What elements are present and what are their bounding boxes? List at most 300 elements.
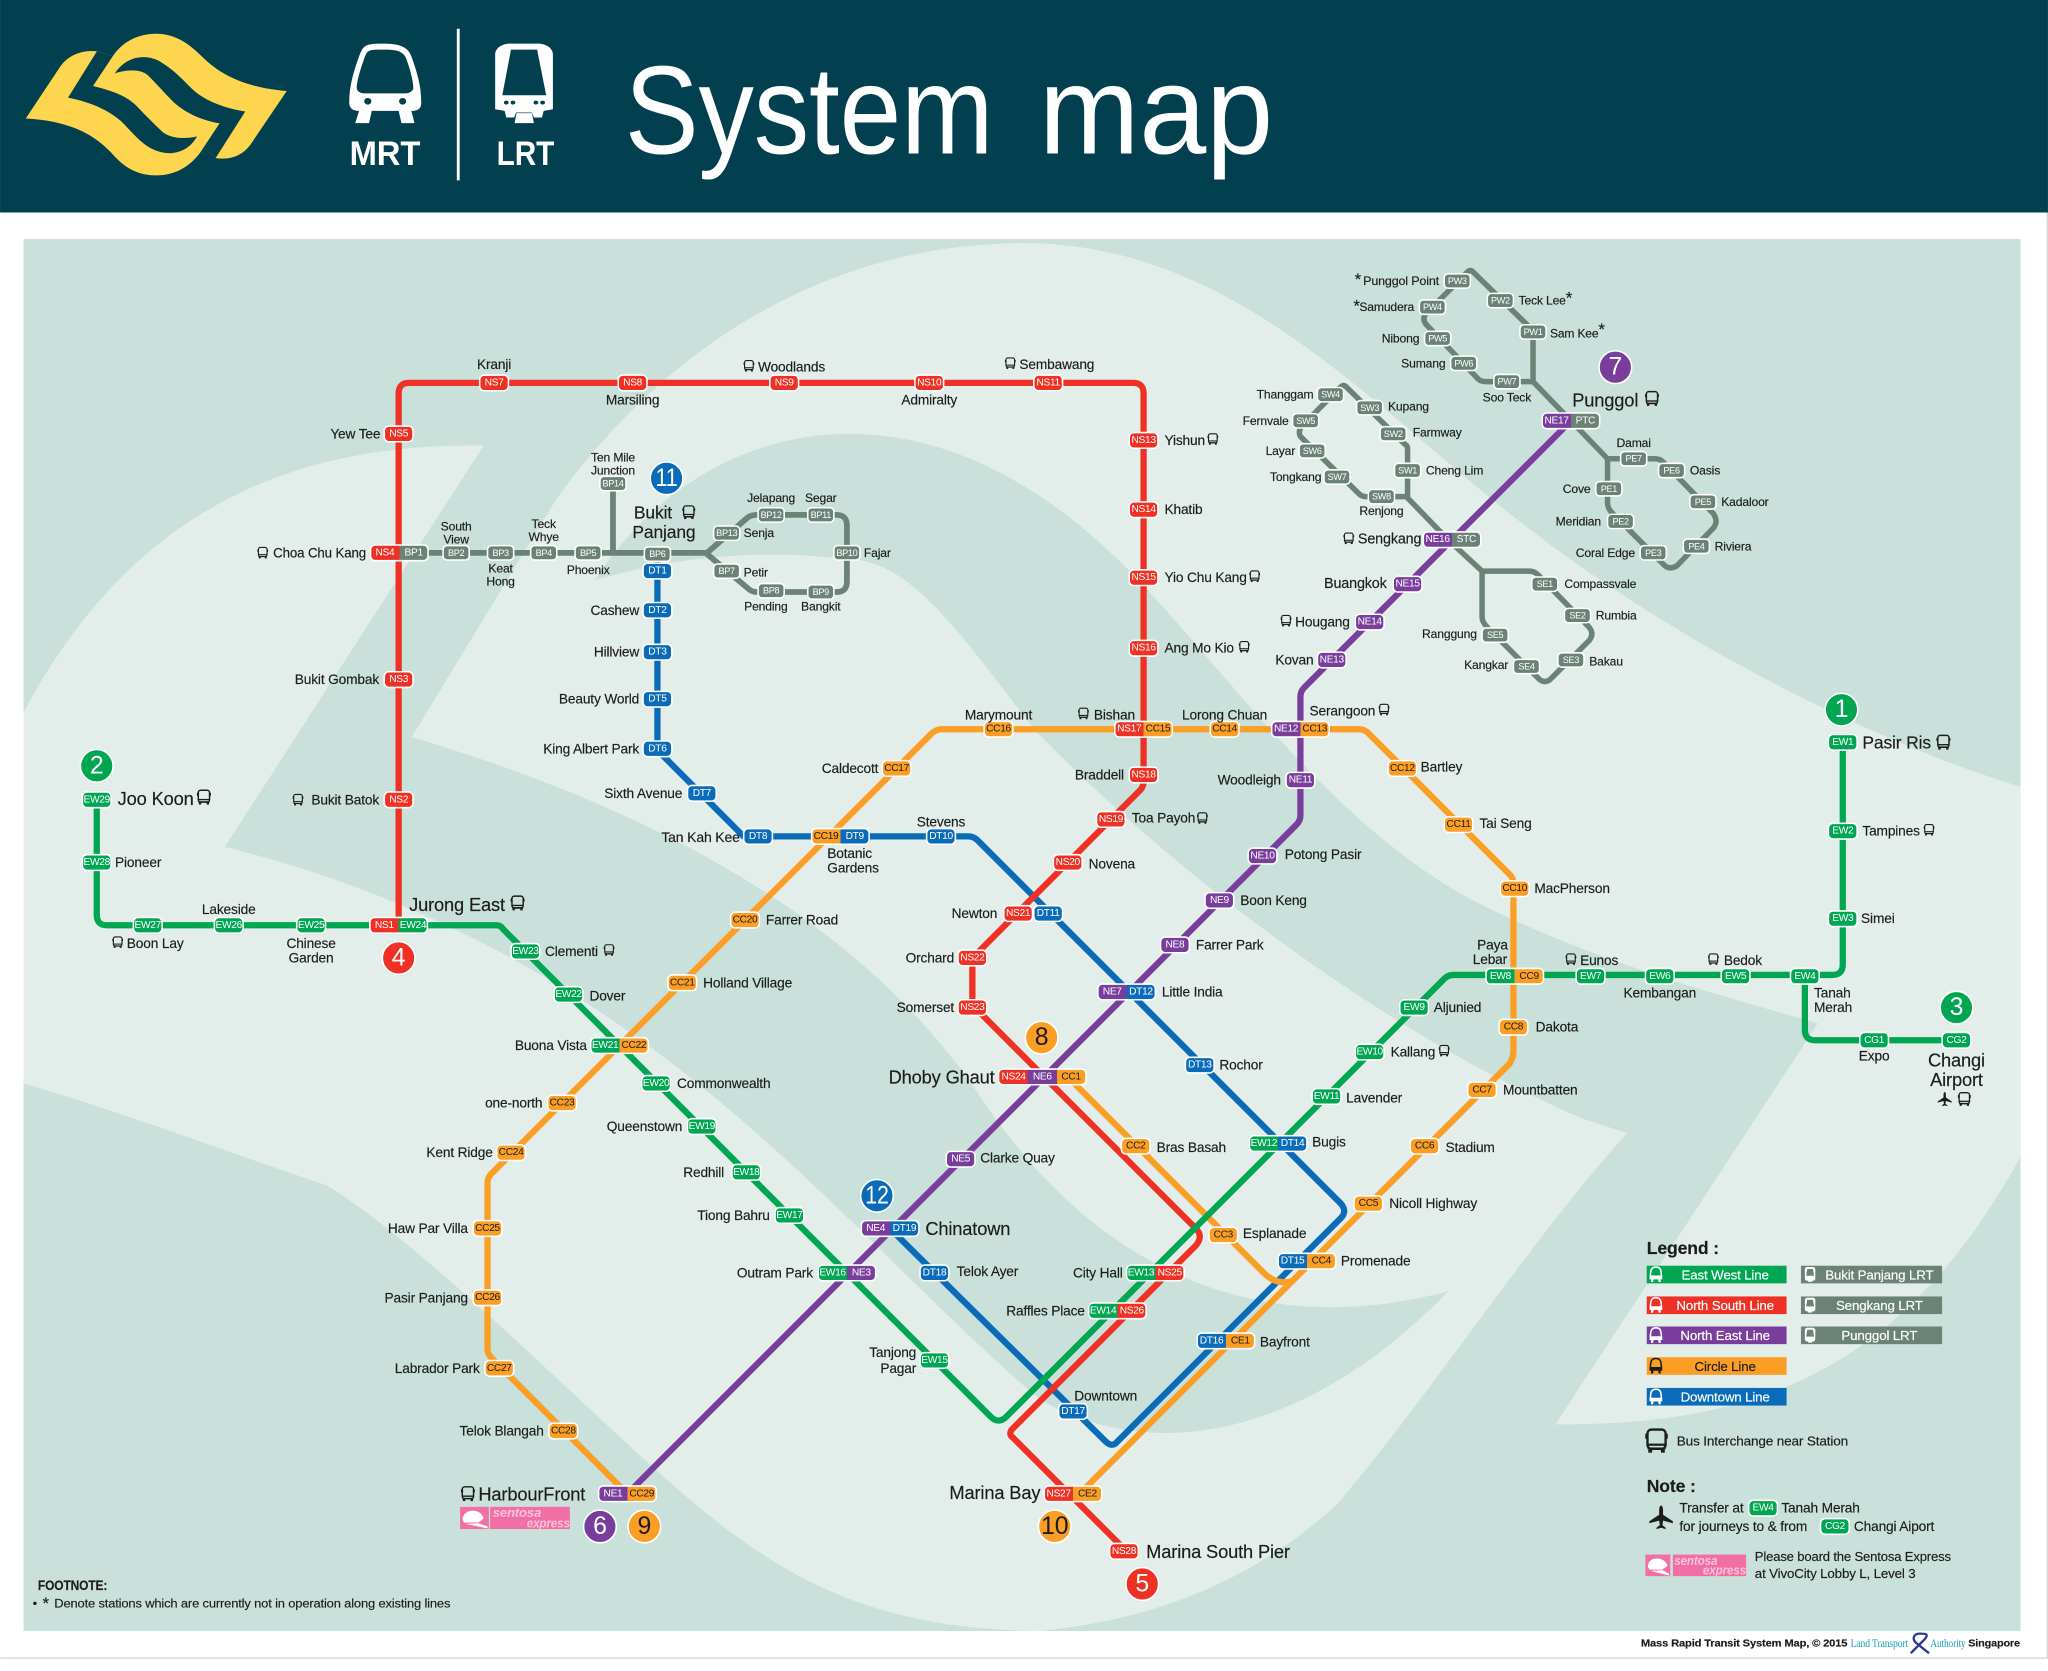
footer credit: Mass Rapid Transit System Map, © 2015	[1641, 1639, 1848, 1650]
North East Line stations: Hougang	[1295, 615, 1350, 630]
numbered terminus markers: 12	[865, 1182, 889, 1209]
icon: airport plane and bus	[1938, 1092, 1971, 1106]
interchange stations: Little India	[1162, 984, 1223, 999]
interchange stations: Sengkang	[1358, 532, 1422, 548]
interchange stations: Raffles Place	[1006, 1303, 1085, 1318]
Punggol LRT stations: PW3	[1448, 276, 1467, 286]
Punggol LRT stations: PE2	[1612, 516, 1629, 526]
interchange stations: DT15	[1281, 1256, 1305, 1267]
interchange stations: EW12	[1251, 1138, 1278, 1149]
Downtown Line stations: Rochor	[1219, 1058, 1263, 1073]
interchange stations: EW14	[1090, 1305, 1117, 1316]
header banner	[0, 0, 2048, 213]
Punggol LRT stations: *	[1598, 320, 1605, 339]
North South Line stations: NS28	[1112, 1546, 1137, 1557]
North South Line stations: NS7	[485, 377, 504, 388]
East West Line stations: Commonwealth	[677, 1076, 770, 1091]
Bukit Panjang LRT stations: BP6	[649, 549, 666, 559]
North South Line stations: Bukit Batok	[311, 792, 379, 807]
Downtown Line stations: Beauty World	[559, 692, 639, 707]
North South Line stations: Woodlands	[758, 360, 825, 375]
footnote: Denote stations which are currently not in operation along existing lines	[54, 1597, 450, 1611]
note text: Sentosa Express: at VivoCity Lobby L, Level 3	[1755, 1566, 1916, 1581]
Punggol LRT stations: PW7	[1498, 377, 1517, 387]
Downtown Line stations: DT10	[929, 831, 953, 842]
East West Line stations: EW25	[298, 920, 325, 931]
East West Line stations: Expo	[1859, 1048, 1890, 1063]
Circle Line stations: CC23	[550, 1098, 575, 1109]
North East Line stations: Woodleigh	[1218, 773, 1281, 788]
Punggol LRT stations: PW1	[1524, 327, 1543, 337]
interchange stations: Lebar	[1473, 952, 1508, 967]
Sengkang LRT stations: Compassvale	[1564, 577, 1637, 591]
numbered terminus markers: 10	[1041, 1513, 1068, 1540]
interchange stations: EW8	[1490, 971, 1512, 982]
Circle Line stations: CC8	[1504, 1022, 1524, 1033]
numbered terminus markers: 11	[655, 465, 678, 492]
Bukit Panjang LRT stations: BP2	[448, 548, 465, 558]
Downtown Line stations	[543, 563, 1263, 1419]
Sengkang LRT stations: SE1	[1537, 579, 1553, 589]
East West Line stations: Garden	[289, 950, 334, 965]
Bukit Panjang LRT stations: Phoenix	[567, 563, 610, 577]
Circle Line stations: Holland Village	[703, 975, 793, 990]
footer credit: Land Transport	[1851, 1638, 1909, 1650]
Bukit Panjang LRT stations: Hong	[486, 575, 515, 589]
Circle Line stations: CC25	[475, 1223, 501, 1234]
numbered terminus markers: 4	[392, 944, 406, 971]
note text: airport transfer: CG2	[1825, 1521, 1846, 1532]
Downtown Line stations: Tan Kah Kee	[661, 830, 740, 845]
Punggol LRT stations: Sumang	[1401, 356, 1445, 370]
East West Line stations: EW3	[1832, 913, 1854, 924]
North South Line stations: NS20	[1056, 857, 1081, 868]
Circle Line stations: Haw Par Villa	[388, 1221, 468, 1236]
East West Line stations: Bedok	[1724, 953, 1762, 968]
East West Line stations: EW28	[84, 857, 111, 868]
East West Line stations: EW20	[643, 1078, 670, 1089]
icon: plane	[1649, 1506, 1673, 1529]
interchange stations: DT19	[893, 1223, 917, 1234]
Circle Line stations: Kent Ridge	[426, 1145, 493, 1160]
East West Line stations: EW4	[1794, 971, 1816, 982]
interchange stations: Chinatown	[925, 1218, 1010, 1239]
legend: Punggol LRT	[1801, 1327, 1942, 1344]
North South Line stations: NS22	[960, 952, 985, 963]
Bukit Panjang LRT stations: BP8	[763, 586, 779, 596]
Bukit Panjang LRT stations: Junction	[591, 463, 635, 477]
Sengkang LRT stations: SE2	[1569, 611, 1586, 621]
Circle Line stations: CC14	[1212, 724, 1238, 735]
Punggol LRT stations: PE6	[1663, 465, 1680, 475]
Circle Line stations	[385, 707, 1610, 1439]
East West Line stations: EW2	[1832, 826, 1854, 837]
title: System	[625, 39, 993, 180]
North South Line stations: NS13	[1131, 435, 1156, 446]
East West Line stations: Joo Koon	[118, 788, 194, 809]
Circle Line stations: CC24	[499, 1147, 524, 1158]
Punggol LRT stations: PE7	[1626, 454, 1642, 464]
Punggol LRT stations: *	[1355, 270, 1362, 289]
Sengkang LRT stations: Cheng Lim	[1426, 463, 1483, 477]
North East Line stations: Farrer Park	[1196, 937, 1264, 952]
Punggol LRT stations: Oasis	[1690, 463, 1720, 477]
Bukit Panjang LRT stations: BP9	[813, 587, 829, 597]
North South Line stations: NS21	[1006, 908, 1031, 919]
numbered terminus markers: 8	[1035, 1024, 1048, 1051]
North South Line stations: NS8	[623, 377, 643, 388]
Punggol LRT stations: Punggol Point	[1363, 274, 1440, 288]
Bukit Panjang LRT stations: Keat	[488, 562, 514, 576]
title	[625, 39, 1273, 180]
East West Line stations: Eunos	[1580, 953, 1618, 968]
Bukit Panjang LRT stations	[441, 450, 891, 613]
interchange stations: NS27	[1047, 1488, 1071, 1499]
Downtown Line stations: DT2	[648, 605, 667, 616]
interchange stations: STC	[1457, 534, 1476, 545]
interchange stations: EW13	[1128, 1267, 1155, 1278]
East West Line stations: CG1	[1864, 1035, 1885, 1046]
Sengkang LRT stations: SE3	[1563, 655, 1579, 665]
Bukit Panjang LRT stations: Petir	[744, 565, 768, 579]
Sengkang LRT stations: Kupang	[1388, 399, 1429, 413]
numbered terminus markers: 9	[638, 1513, 651, 1540]
Sengkang LRT stations: SW1	[1398, 465, 1417, 475]
icon: Sentosa Express at HarbourFront: express	[527, 1516, 570, 1531]
route: North South Line	[399, 383, 1200, 1549]
East West Line stations: Chinese	[286, 936, 336, 951]
Punggol LRT stations: PE3	[1645, 548, 1662, 558]
Sengkang LRT stations: SW7	[1328, 472, 1347, 482]
icon: Sentosa Express: express	[1703, 1563, 1746, 1578]
East West Line stations: Tanjong	[869, 1345, 916, 1360]
North South Line stations: NS5	[389, 428, 409, 439]
legend: North East Line: North East Line	[1680, 1328, 1770, 1343]
North South Line stations: NS18	[1131, 769, 1156, 780]
East West Line stations: Clementi	[545, 944, 598, 959]
interchange stations: NE3	[852, 1267, 871, 1278]
interchange stations: EW21	[592, 1040, 619, 1051]
East West Line stations: Dover	[589, 988, 626, 1003]
North South Line stations: NS10	[917, 377, 942, 388]
interchange stations: HarbourFront	[478, 1483, 585, 1504]
interchange stations: Marina Bay	[949, 1482, 1041, 1503]
route: Changi Airport branch	[1805, 976, 1956, 1040]
Sengkang LRT stations: Rumbia	[1596, 609, 1637, 623]
Sengkang LRT stations	[1243, 387, 1637, 674]
Circle Line stations: CC21	[670, 977, 695, 988]
Downtown Line stations: Stevens	[917, 815, 966, 830]
Circle Line stations: CC11	[1447, 819, 1471, 830]
Bukit Panjang LRT stations: BP7	[719, 566, 735, 576]
Circle Line stations: CC2	[1126, 1141, 1146, 1152]
interchange stations: BP1	[405, 547, 423, 558]
Punggol LRT stations: PE1	[1601, 484, 1617, 494]
Downtown Line stations: Sixth Avenue	[604, 786, 683, 801]
Bukit Panjang LRT stations: BP4	[536, 548, 552, 558]
North South Line stations: Sembawang	[1019, 357, 1094, 372]
East West Line stations: Changi	[1928, 1049, 1985, 1070]
Circle Line stations: Esplanade	[1243, 1226, 1307, 1241]
East West Line stations: Pagar	[880, 1361, 917, 1376]
interchange stations: CC19	[814, 831, 839, 842]
North South Line stations: Yio Chu Kang	[1164, 570, 1247, 585]
Punggol LRT stations: PW6	[1454, 358, 1473, 368]
East West Line stations: EW6	[1649, 971, 1671, 982]
footnote: FOOTNOTE:	[38, 1578, 107, 1593]
interchange stations: NE12	[1274, 724, 1299, 735]
Punggol LRT stations: PE5	[1695, 497, 1711, 507]
interchange stations: CC13	[1302, 724, 1328, 735]
Punggol LRT stations: PW4	[1423, 302, 1442, 312]
North South Line stations: NS2	[389, 794, 409, 805]
East West Line stations: EW17	[776, 1210, 803, 1221]
Downtown Line stations: DT13	[1188, 1060, 1212, 1071]
interchange stations: EW16	[819, 1267, 846, 1278]
North South Line stations: Yishun	[1164, 433, 1205, 448]
Circle Line stations: CC27	[487, 1363, 512, 1374]
North East Line stations: NE5	[951, 1154, 971, 1165]
footnote	[33, 1578, 450, 1613]
interchange stations: NS25	[1158, 1267, 1182, 1278]
interchange stations: CE2	[1078, 1488, 1097, 1499]
East West Line stations: EW15	[921, 1355, 948, 1366]
Punggol LRT stations: Samudera	[1359, 300, 1415, 314]
Bukit Panjang LRT stations: South	[441, 520, 472, 534]
Bukit Panjang LRT stations: Jelapang	[747, 491, 795, 505]
Circle Line stations: CC28	[551, 1426, 576, 1437]
Punggol LRT stations: Coral Edge	[1576, 546, 1635, 560]
Bukit Panjang LRT stations: Fajar	[864, 546, 891, 560]
East West Line stations: EW26	[216, 920, 243, 931]
Punggol LRT stations: Meridian	[1556, 514, 1601, 528]
Punggol LRT stations: Sam Kee	[1550, 326, 1599, 340]
footnote: •	[33, 1597, 37, 1611]
icon: Sentosa Express at HarbourFront: sentosa	[493, 1505, 541, 1520]
Downtown Line stations: DT17	[1061, 1406, 1085, 1417]
North South Line stations: Marsiling	[606, 392, 659, 407]
Circle Line stations: CC16	[986, 724, 1012, 735]
North South Line stations: Khatib	[1164, 502, 1203, 517]
interchange stations: CC15	[1146, 724, 1171, 735]
Sengkang LRT stations: SW5	[1296, 416, 1315, 426]
interchange stations: Bayfront	[1260, 1335, 1310, 1350]
North East Line stations: NE9	[1210, 895, 1229, 906]
note text: airport transfer: for journeys to & from	[1679, 1519, 1807, 1534]
interchange stations: NE16	[1426, 534, 1450, 545]
Punggol LRT stations: *	[1353, 296, 1360, 315]
interchange stations: CC1	[1061, 1071, 1081, 1082]
Circle Line stations: Pasir Panjang	[385, 1290, 468, 1305]
East West Line stations: Merah	[1814, 1000, 1852, 1015]
East West Line stations: Lakeside	[202, 902, 256, 917]
interchange stations: Buona Vista	[515, 1038, 587, 1053]
East West Line stations: EW29	[84, 794, 111, 805]
Downtown Line stations: DT5	[648, 694, 667, 705]
Punggol LRT stations: *	[1566, 288, 1573, 307]
East West Line stations: Queenstown	[607, 1119, 682, 1134]
East West Line stations: EW23	[512, 946, 539, 957]
note text: airport transfer: Transfer at	[1679, 1501, 1744, 1516]
interchange stations: Punggol	[1572, 389, 1638, 410]
icon: MRT train	[349, 44, 421, 123]
North South Line stations	[293, 357, 1290, 1562]
Circle Line stations: Nicoll Highway	[1389, 1196, 1477, 1211]
note text: airport transfer: EW4	[1752, 1503, 1774, 1514]
East West Line stations: Kembangan	[1624, 986, 1696, 1001]
North South Line stations: Kranji	[477, 357, 511, 372]
Circle Line stations: Caldecott	[822, 761, 879, 776]
Circle Line stations: MacPherson	[1534, 881, 1610, 896]
legend heading: Legend :	[1647, 1238, 1719, 1258]
icon: Sentosa Express: sentosa	[1674, 1553, 1717, 1568]
East West Line stations: Tiong Bahru	[697, 1208, 770, 1223]
East West Line stations: EW5	[1725, 971, 1747, 982]
interchange stations: DT12	[1129, 986, 1153, 997]
Downtown Line stations: DT18	[923, 1267, 947, 1278]
interchange stations: DT16	[1200, 1335, 1224, 1346]
icon: SMRT wing logo	[26, 34, 287, 175]
Punggol LRT stations: PW5	[1428, 333, 1447, 343]
East West Line stations: Aljunied	[1434, 1000, 1481, 1015]
East West Line stations: EW1	[1832, 737, 1854, 748]
note text: airport transfer: Changi Aiport	[1854, 1519, 1935, 1534]
interchange stations: DT14	[1281, 1138, 1305, 1149]
route: Sengkang LRT	[1299, 386, 1592, 682]
Sengkang LRT stations: Tongkang	[1270, 470, 1321, 484]
footer credit	[1641, 1634, 2020, 1653]
legend: bus interchange	[1645, 1430, 1848, 1453]
interchange stations: PTC	[1576, 415, 1595, 426]
Bukit Panjang LRT stations: BP14	[602, 479, 624, 489]
East West Line stations: Simei	[1861, 911, 1895, 926]
Sengkang LRT stations: Renjong	[1359, 504, 1404, 518]
Downtown Line stations: DT7	[693, 788, 712, 799]
North South Line stations: Novena	[1089, 856, 1136, 871]
Circle Line stations: one-north	[485, 1096, 542, 1111]
Sengkang LRT stations: Bakau	[1589, 654, 1623, 668]
North East Line stations: Clarke Quay	[980, 1150, 1055, 1165]
North South Line stations: Marina South Pier	[1146, 1541, 1290, 1562]
numbered terminus markers: 7	[1609, 354, 1622, 381]
icon: LRT train	[495, 44, 553, 123]
interchange stations: EW24	[400, 920, 427, 931]
North South Line stations: DT11	[1037, 908, 1060, 919]
title: map	[1039, 39, 1273, 180]
North East Line stations: Boon Keng	[1240, 893, 1307, 908]
Sengkang LRT stations: SE5	[1487, 630, 1504, 640]
Bukit Panjang LRT stations: Ten Mile	[591, 450, 635, 464]
Downtown Line stations: Cashew	[590, 603, 639, 618]
North South Line stations: NS9	[775, 377, 794, 388]
interchange stations: Botanic	[827, 846, 872, 861]
North East Line stations: Potong Pasir	[1285, 847, 1362, 862]
icon: Sentosa Express at HarbourFront	[460, 1505, 570, 1531]
interchange stations: NS4	[376, 547, 395, 558]
legend: East West Line	[1647, 1266, 1787, 1283]
numbered terminus markers	[80, 351, 1973, 1600]
Bukit Panjang LRT stations: BP13	[716, 528, 737, 538]
Bukit Panjang LRT stations: Whye	[529, 530, 559, 544]
interchange stations: NS24	[1001, 1071, 1026, 1082]
North South Line stations: NS3	[389, 674, 409, 685]
interchange stations: Serangoon	[1310, 703, 1375, 718]
East West Line stations: EW9	[1404, 1002, 1425, 1013]
Circle Line stations: Lorong Chuan	[1182, 707, 1267, 722]
legend: Downtown Line	[1647, 1388, 1787, 1406]
Sengkang LRT stations: SW8	[1372, 492, 1391, 502]
Circle Line stations: Stadium	[1445, 1140, 1495, 1155]
East West Line stations: EW18	[733, 1167, 760, 1178]
North South Line stations: Toa Payoh	[1132, 811, 1195, 826]
Punggol LRT stations: Damai	[1617, 436, 1651, 450]
Punggol LRT stations: Teck Lee	[1519, 294, 1566, 308]
legend: East West Line: East West Line	[1682, 1267, 1769, 1282]
Circle Line stations: Labrador Park	[395, 1361, 480, 1376]
North East Line stations: NE10	[1250, 851, 1275, 862]
Downtown Line stations: DT8	[749, 831, 768, 842]
numbered terminus markers: 2	[90, 752, 104, 779]
East West Line stations: Pasir Ris	[1862, 732, 1931, 752]
interchange stations: Outram Park	[737, 1265, 813, 1280]
note	[1645, 1476, 1951, 1581]
interchange stations: NE7	[1103, 986, 1122, 997]
North South Line stations: Yew Tee	[330, 426, 381, 441]
East West Line stations: Boon Lay	[127, 936, 184, 951]
Circle Line stations: Telok Blangah	[460, 1424, 544, 1439]
Bukit Panjang LRT stations: BP3	[492, 548, 509, 558]
interchange stations: NS17	[1117, 724, 1142, 735]
Sengkang LRT stations: Kangkar	[1464, 658, 1508, 672]
LRT caption: LRT	[497, 135, 554, 173]
Circle Line stations: CC26	[475, 1292, 501, 1303]
North East Line stations: NE14	[1358, 617, 1382, 628]
East West Line stations: EW7	[1580, 971, 1602, 982]
legend: North South Line: North South Line	[1676, 1298, 1774, 1313]
Circle Line stations: Bras Basah	[1157, 1140, 1226, 1155]
East West Line stations: Tampines	[1862, 824, 1920, 839]
North East Line stations	[946, 576, 1422, 1167]
East West Line stations: EW10	[1356, 1047, 1384, 1058]
East West Line stations: Airport	[1930, 1069, 1983, 1090]
numbered terminus markers: 5	[1135, 1570, 1149, 1597]
interchange stations: Gardens	[827, 860, 879, 875]
interchange stations: Bugis	[1312, 1135, 1346, 1150]
Circle Line stations: Marymount	[965, 707, 1032, 722]
North South Line stations: NS23	[960, 1002, 985, 1013]
Bukit Panjang LRT stations: View	[443, 533, 469, 547]
interchange stations: CE1	[1231, 1335, 1250, 1346]
interchange stations: CC29	[629, 1488, 655, 1499]
interchange stations: NE17	[1544, 415, 1569, 426]
interchange stations	[257, 389, 1659, 1504]
East West Line stations: Redhill	[683, 1165, 724, 1180]
route: Bukit Panjang LRT	[414, 484, 847, 592]
Circle Line stations: CC6	[1415, 1141, 1435, 1152]
route: Punggol LRT	[1424, 271, 1716, 568]
footer credit: Singapore	[1968, 1639, 2020, 1650]
legend: Sengkang LRT: Sengkang LRT	[1836, 1298, 1923, 1313]
East West Line stations: Pioneer	[115, 855, 162, 870]
interchange stations: NS26	[1120, 1305, 1145, 1316]
North South Line stations: NS11	[1036, 377, 1061, 388]
Punggol LRT stations: Cove	[1563, 482, 1591, 496]
note text: Sentosa Express	[1755, 1549, 1951, 1581]
Bukit Panjang LRT stations: Senja	[744, 526, 774, 540]
Bukit Panjang LRT stations: BP5	[580, 548, 597, 558]
North East Line stations: Kovan	[1275, 652, 1313, 667]
numbered terminus markers: 3	[1950, 994, 1963, 1021]
